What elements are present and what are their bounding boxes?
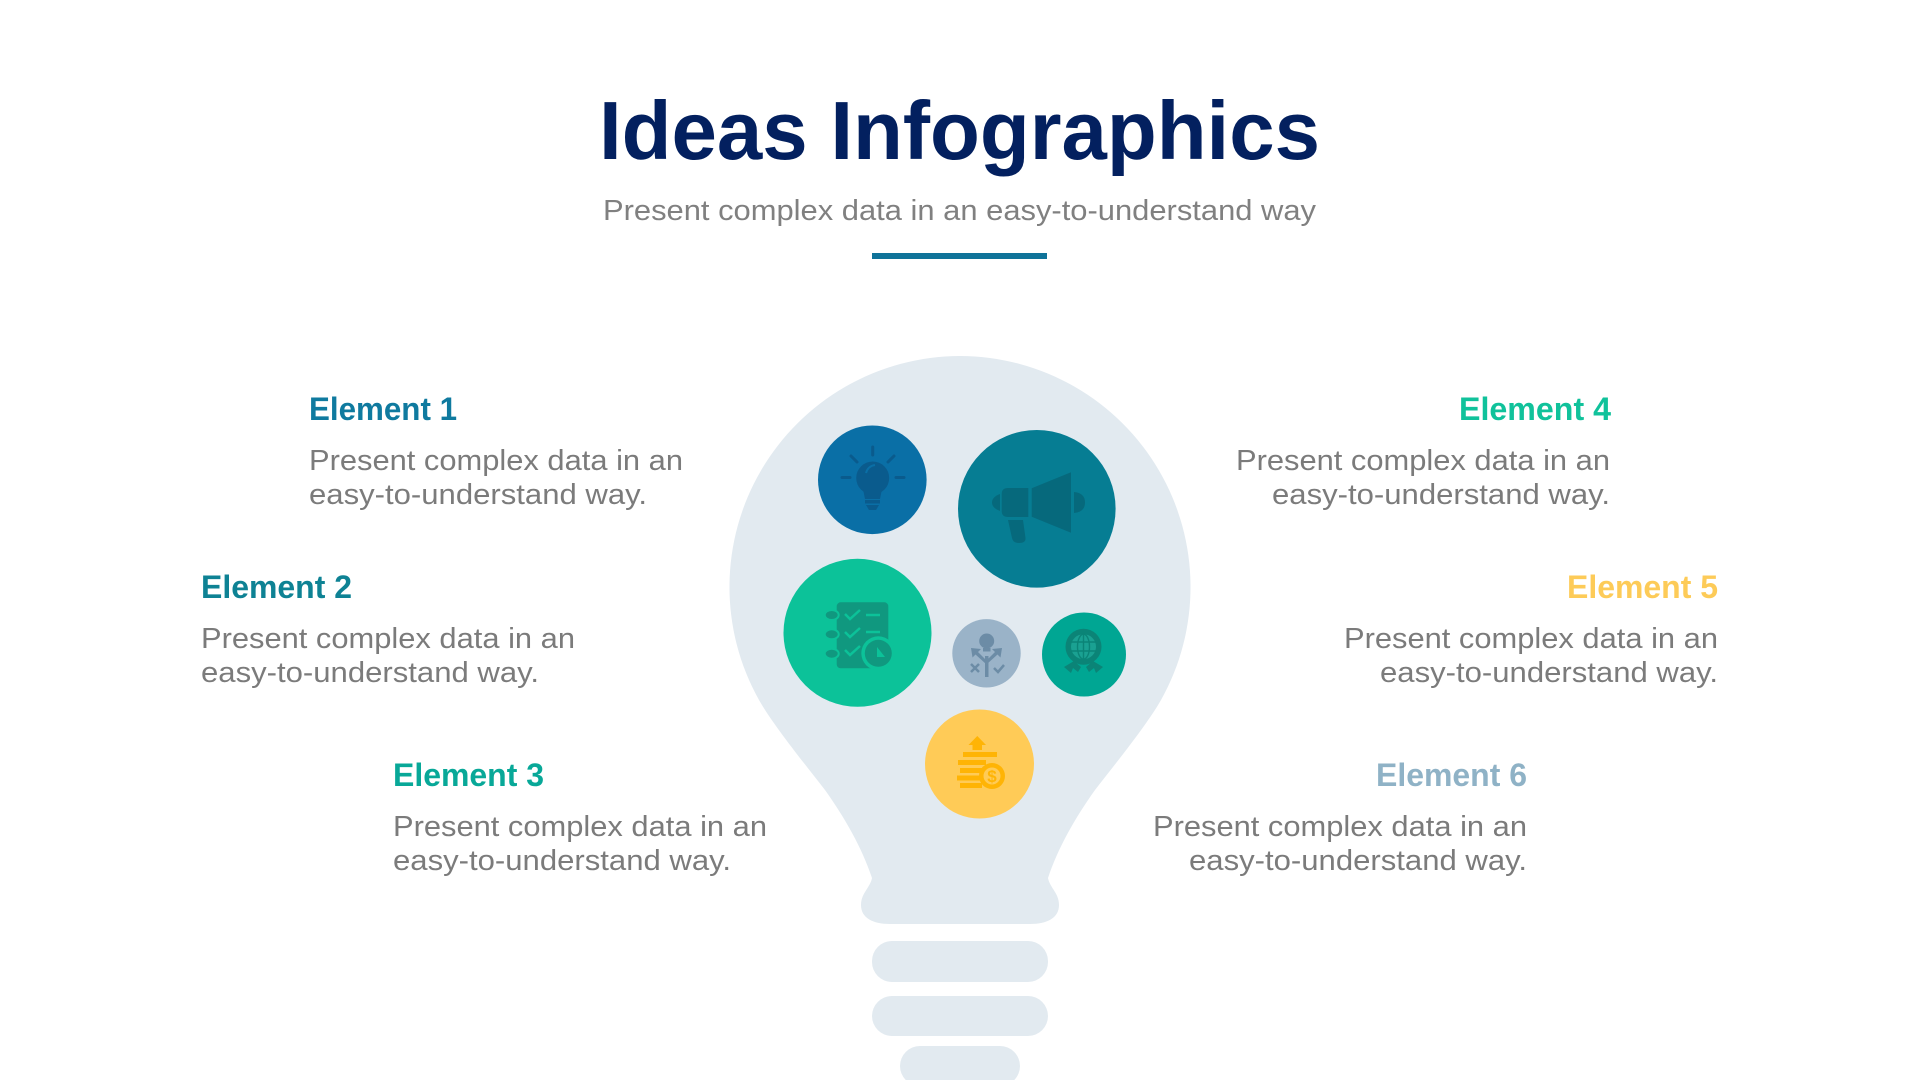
- description: element 3: Present complex data in an: [393, 811, 767, 843]
- heading: element 5: Element 5: [1567, 569, 1718, 605]
- heading: element 4: Element 4: [1459, 391, 1611, 427]
- text block: element 6: [1153, 757, 1527, 877]
- description: element 1: [309, 445, 683, 511]
- circle icon: coins and up arrow: [925, 710, 1034, 818]
- heading: element 1: Element 1: [309, 391, 457, 427]
- circle icon: global award: [1042, 612, 1126, 696]
- circle icon: coins and up arrow: $: [987, 767, 997, 786]
- description: element 4: easy-to-understand way.: [1272, 479, 1610, 511]
- circle icon: decision paths: [952, 619, 1021, 688]
- circle icon: idea bulb: [818, 426, 927, 534]
- description: element 5: [1344, 623, 1718, 689]
- description: element 6: easy-to-understand way.: [1189, 845, 1527, 877]
- description: element 6: Present complex data in an: [1153, 811, 1527, 843]
- description: element 1: Present complex data in an: [309, 445, 683, 477]
- subtitle: Present complex data in an easy-to-understand way: [603, 195, 1317, 227]
- description: element 2: easy-to-understand way.: [201, 657, 539, 689]
- text block: element 3: [393, 757, 767, 877]
- bulb base ring 2: [872, 996, 1048, 1036]
- description: element 3: [393, 811, 767, 877]
- text block: element 5: [1344, 569, 1718, 689]
- light bulb illustration: [729, 356, 1191, 1080]
- circle icon: megaphone: [958, 430, 1116, 588]
- circle icon: checklist with clock: [784, 559, 932, 707]
- text block: element 1: [309, 391, 683, 511]
- description: element 1: easy-to-understand way.: [309, 479, 647, 511]
- description: element 2: [201, 623, 575, 689]
- heading: element 3: Element 3: [393, 757, 544, 793]
- heading: element 6: Element 6: [1376, 757, 1527, 793]
- description: element 2: Present complex data in an: [201, 623, 575, 655]
- title: Ideas Infographics: [599, 84, 1320, 177]
- description: element 4: Present complex data in an: [1236, 445, 1610, 477]
- text block: element 2: [201, 569, 575, 689]
- bulb base tip: [900, 1046, 1020, 1080]
- description: element 5: Present complex data in an: [1344, 623, 1718, 655]
- text block: element 4: [1236, 391, 1611, 511]
- bulb glass: [729, 356, 1191, 924]
- description: element 6: [1153, 811, 1527, 877]
- description: element 4: [1236, 445, 1610, 511]
- heading: element 2: Element 2: [201, 569, 352, 605]
- title underline: [872, 253, 1047, 259]
- bulb base ring 1: [872, 941, 1048, 982]
- description: element 3: easy-to-understand way.: [393, 845, 731, 877]
- description: element 5: easy-to-understand way.: [1380, 657, 1718, 689]
